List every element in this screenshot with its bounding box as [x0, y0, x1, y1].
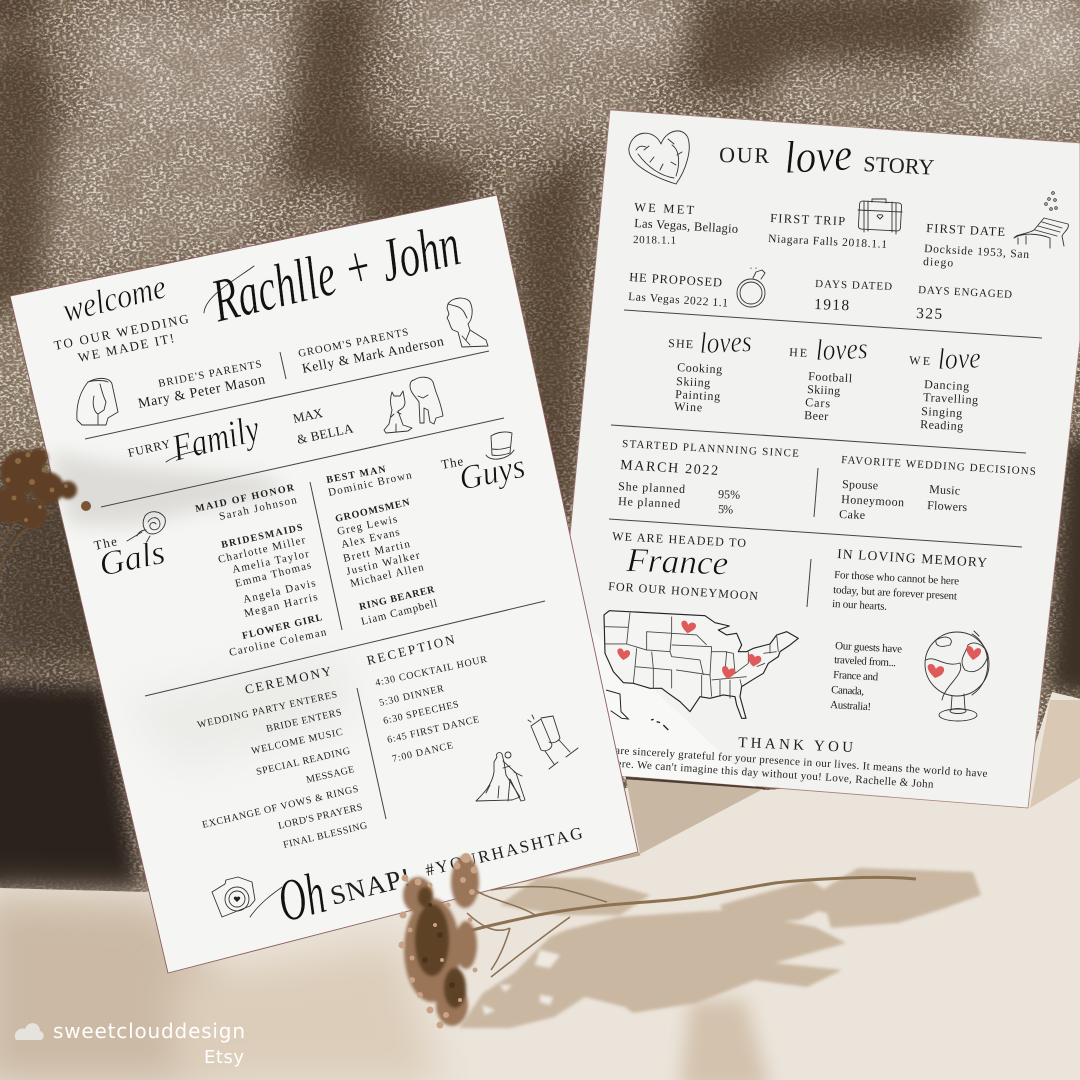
- lists of loves: Skiing: [676, 374, 711, 390]
- reception: 4:30 COCKTAIL HOUR: [374, 654, 488, 689]
- icon: cat and dog: [384, 377, 443, 433]
- guys party: Justin Walker: [345, 549, 421, 578]
- icon: bride veil: [77, 378, 118, 425]
- icon: top hat: [486, 432, 514, 459]
- favorite decisions: Honeymoon: [841, 492, 904, 509]
- gals party: Charlotte Miller: [217, 534, 307, 566]
- favorite decisions: Cake: [839, 507, 865, 522]
- guys party: Michael Allen: [349, 561, 425, 590]
- icon: cloud: [15, 1023, 44, 1040]
- divider line: [609, 519, 1022, 547]
- the guys: Guys: [456, 448, 528, 498]
- planning stats: MARCH 2022: [620, 458, 718, 479]
- gals party: Emma Thomas: [234, 559, 312, 590]
- honeymoon: France: [625, 542, 729, 583]
- ceremony: WEDDING PARTY ENTERES: [196, 689, 338, 731]
- reception: 5:30 DINNER: [378, 683, 445, 709]
- lists of loves: Beer: [804, 408, 829, 423]
- ceremony: [196, 663, 368, 851]
- card sheet: [10, 195, 638, 973]
- in loving memory: For those who cannot be here: [834, 569, 959, 588]
- ceremony: BRIDE ENTERS: [265, 707, 343, 735]
- lists of loves: Football: [808, 369, 853, 385]
- honeymoon: [608, 529, 759, 603]
- panel: our love story card: [540, 110, 1080, 808]
- welcome text: WE MADE IT!: [77, 330, 176, 365]
- divider line: [611, 425, 1026, 453]
- background: table surface: [0, 692, 1080, 1080]
- panel: welcome program card: [10, 195, 638, 973]
- guests text: Canada,: [831, 684, 865, 698]
- ceremony: LORD'S PRAYERS: [277, 802, 363, 832]
- guests text: Australia!: [830, 699, 871, 713]
- light reflection on card: [622, 776, 756, 786]
- watermark: Etsy: [204, 1047, 244, 1068]
- divider line: [624, 310, 1042, 338]
- gals party: Caroline Coleman: [228, 626, 328, 659]
- title: [719, 128, 935, 183]
- oh snap: [250, 823, 584, 935]
- guys party: Liam Campbell: [360, 597, 438, 628]
- ceremony: WELCOME MUSIC: [250, 727, 344, 757]
- lists of loves: Dancing: [924, 377, 970, 393]
- lists of loves: Skiing: [807, 382, 841, 398]
- honeymoon: FOR OUR HONEYMOON: [608, 579, 759, 603]
- icon: leaf heart: [629, 131, 689, 184]
- guys party: RING BEARER: [358, 584, 436, 613]
- milestones: FIRST TRIP: [770, 211, 845, 228]
- script heading: [59, 211, 466, 336]
- milestones: Las Vegas 2022 1.1: [628, 291, 729, 310]
- icon: camera: [212, 877, 255, 917]
- the gals: Gals: [96, 534, 168, 584]
- ceremony: FINAL BLESSING: [282, 820, 368, 851]
- planning stats: She planned: [618, 479, 685, 496]
- lists of loves: Reading: [920, 417, 964, 433]
- reception: 6:30 SPEECHES: [382, 699, 460, 727]
- title: love: [783, 128, 853, 183]
- milestones: Dockside 1953, San: [924, 243, 1030, 261]
- parents: Mary & Peter Mason: [137, 372, 266, 412]
- script heading: welcome: [59, 268, 170, 330]
- milestones: HE PROPOSED: [629, 270, 722, 290]
- oh snap: SNAP!: [327, 862, 414, 911]
- icon: ring: [737, 268, 765, 307]
- guys party: Dominic Brown: [327, 469, 413, 499]
- milestones: FIRST DATE: [926, 221, 1006, 239]
- guys party: GROOMSMEN: [334, 497, 411, 525]
- card sheet: [548, 110, 1080, 808]
- guests text: traveled from...: [834, 654, 897, 669]
- gals party: Angela Davis: [242, 577, 317, 606]
- she / he / we loves: SHE: [668, 336, 694, 351]
- watermark: [15, 1019, 245, 1068]
- in loving memory: IN LOVING MEMORY: [837, 546, 988, 570]
- icon: globe with hearts: [925, 631, 989, 721]
- favorite decisions: Flowers: [927, 498, 968, 514]
- she / he / we loves: love: [937, 342, 981, 376]
- thank you: you here. We can't imagine this day without you! Love, Rachelle & John: [590, 756, 934, 791]
- guests text: France and: [833, 669, 879, 683]
- window light shadow on card: [50, 452, 350, 770]
- lists of loves: [674, 360, 979, 433]
- gals party: Sarah Johnson: [218, 494, 298, 523]
- milestones: Las Vegas, Bellagio: [634, 216, 738, 236]
- gals party: Megan Harris: [243, 591, 319, 620]
- she / he / we loves: [668, 325, 981, 376]
- gals party: [194, 482, 328, 659]
- milestones: DAYS ENGAGED: [918, 284, 1012, 301]
- guests text: Our guests have: [835, 640, 902, 656]
- script heading: Rachlle + John: [205, 211, 466, 336]
- she / he / we loves: loves: [815, 332, 868, 367]
- she / he / we loves: HE: [789, 345, 808, 360]
- planning stats: STARTED PLANNNING SINCE: [622, 438, 799, 460]
- ceremony: EXCHANGE OF VOWS & RINGS: [201, 784, 359, 831]
- in loving memory: today, but are forever present: [833, 584, 957, 602]
- furry family: Family: [167, 408, 264, 470]
- in loving memory: in our hearts.: [832, 598, 888, 613]
- divider line: [145, 601, 545, 696]
- icon: champagne toast: [528, 715, 578, 769]
- guys party: Alex Evans: [340, 526, 401, 551]
- lists of loves: Singing: [921, 404, 963, 420]
- reception: [365, 631, 488, 765]
- favorite decisions: FAVORITE WEDDING DECISIONS: [841, 454, 1036, 478]
- gals party: Amelia Taylor: [231, 548, 310, 576]
- gals party: MAID OF HONOR: [194, 482, 296, 515]
- guys party: BEST MAN: [326, 464, 387, 486]
- furry family: & BELLA: [296, 420, 355, 447]
- icon: rose: [127, 512, 165, 543]
- milestones: Niagara Falls 2018.1.1: [768, 233, 888, 251]
- planning stats: 95%: [718, 487, 740, 502]
- divider line: [101, 418, 504, 507]
- guys party: Greg Lewis: [336, 513, 398, 538]
- guys party: [326, 464, 438, 628]
- milestones: 2018.1.1: [633, 234, 676, 247]
- honeymoon: WE ARE HEADED TO: [612, 529, 747, 550]
- title: STORY: [863, 151, 935, 180]
- furry family: [127, 405, 355, 470]
- icon: suitcase: [858, 199, 902, 234]
- gals party: FLOWER GIRL: [241, 612, 324, 642]
- ceremony: MESSAGE: [305, 764, 355, 786]
- planning stats: [618, 438, 799, 517]
- milestones: DAYS DATED: [815, 278, 892, 293]
- divider line: [85, 351, 489, 439]
- the guys: The: [440, 453, 464, 472]
- chart: US map with hearts: [604, 611, 798, 730]
- favorite decisions: [839, 454, 1036, 522]
- lists of loves: Cars: [805, 395, 831, 410]
- reception: 7:00 DANCE: [391, 740, 454, 765]
- heart marker: [617, 648, 630, 660]
- guys party: Brett Martin: [342, 538, 411, 565]
- heart marker: [681, 621, 696, 633]
- she / he / we loves: loves: [699, 325, 752, 360]
- heart marker: [722, 666, 735, 679]
- thank you: THANK YOU: [738, 735, 854, 756]
- favorite decisions: Spouse: [842, 477, 878, 492]
- icon: groom: [447, 298, 488, 347]
- ceremony: SPECIAL READING: [255, 746, 351, 778]
- title: OUR: [719, 142, 770, 168]
- milestones: diego: [923, 256, 954, 270]
- flower shadow on table: [459, 868, 981, 1028]
- icon: dancing couple: [476, 752, 525, 801]
- thank you: We are sincerely grateful for your presence in our lives. It means the world to have: [597, 744, 988, 780]
- lists of loves: Wine: [674, 399, 703, 414]
- milestones: [628, 200, 1030, 323]
- milestones: 1918: [814, 296, 850, 314]
- milestones: WE MET: [634, 200, 695, 217]
- oh snap: Oh: [271, 859, 332, 935]
- gals party: BRIDESMAIDS: [220, 522, 304, 551]
- favorite decisions: Music: [929, 482, 961, 498]
- parents: BRIDE'S PARENTS: [157, 358, 263, 390]
- reception: RECEPTION: [365, 631, 457, 668]
- parents: GROOM'S PARENTS: [297, 326, 409, 360]
- lists of loves: Painting: [675, 387, 721, 403]
- oh snap: #YOURHASHTAG: [423, 823, 584, 880]
- she / he / we loves: WE: [909, 353, 931, 368]
- guests text: [830, 640, 902, 713]
- parents: Kelly & Mark Anderson: [301, 333, 445, 376]
- flower: dried stem on table: [398, 853, 916, 1028]
- reception: 6:45 FIRST DANCE: [386, 714, 480, 746]
- watermark: sweetclouddesign: [53, 1019, 245, 1043]
- heart marker: [748, 654, 761, 667]
- milestones: 325: [916, 305, 943, 323]
- planning stats: He planned: [618, 494, 680, 511]
- welcome text: TO OUR WEDDING: [53, 311, 190, 353]
- lists of loves: Cooking: [677, 360, 723, 376]
- parents: [137, 326, 445, 412]
- thank you: [590, 735, 988, 791]
- furry family: MAX: [292, 405, 325, 426]
- furry family: FURRY: [127, 437, 172, 460]
- flower: left dried bunch: [0, 448, 91, 568]
- icon: bench and hearts: [1014, 192, 1068, 248]
- lists of loves: Travelling: [923, 390, 979, 407]
- planning stats: 5%: [718, 502, 733, 517]
- the gals: The: [93, 533, 118, 553]
- ceremony: CEREMONY: [243, 663, 333, 697]
- in loving memory: [832, 546, 988, 613]
